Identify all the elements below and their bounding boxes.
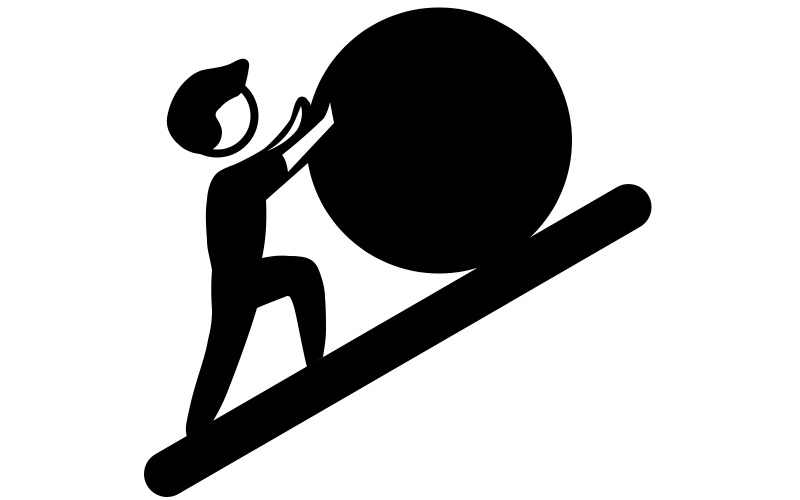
white highlight along lower arm [282,102,334,172]
torso, arms and legs [186,97,330,440]
hair [167,59,249,155]
slope [167,207,628,474]
white gap between forearm and hand [267,106,302,151]
head ring [180,78,254,154]
figure [167,59,334,440]
boulder [306,8,572,274]
